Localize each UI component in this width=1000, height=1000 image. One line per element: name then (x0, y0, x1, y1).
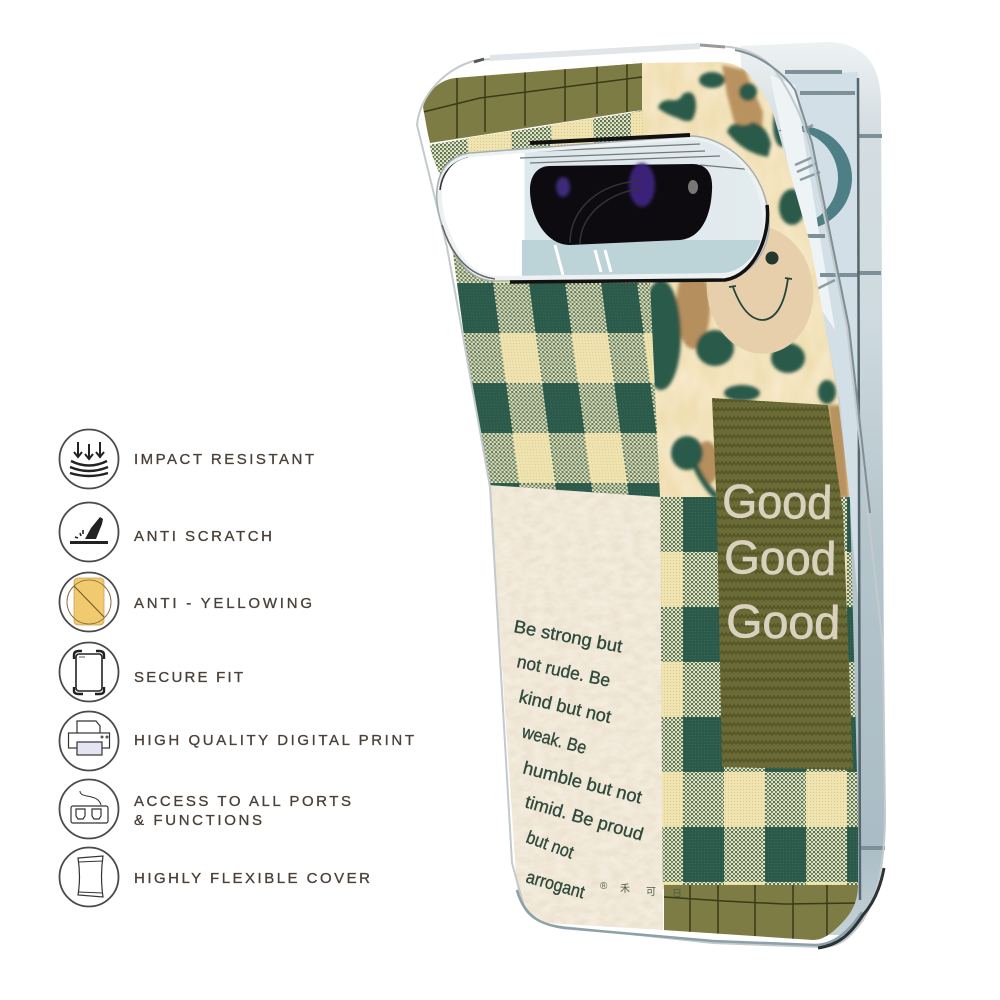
fur patch (640, 55, 865, 515)
small print characters: 日 (672, 889, 682, 900)
quote text: humble but not (521, 758, 644, 807)
quote text: but not (524, 827, 577, 863)
label: impact resistant: IMPACT RESISTANT (134, 451, 314, 468)
icon: ports (60, 780, 118, 838)
small print characters (600, 882, 680, 898)
label: anti scratch: ANTI SCRATCH (134, 528, 272, 545)
label: anti yellowing: ANTI - YELLOWING (134, 595, 312, 612)
icon: impact resistant (60, 430, 118, 488)
lens (530, 163, 712, 245)
small print characters: 禾 (620, 883, 630, 895)
icon: digital print (60, 712, 118, 770)
olive grid bottom (664, 885, 858, 940)
icon: flexible cover (60, 848, 118, 906)
label: digital print: HIGH QUALITY DIGITAL PRINT (134, 732, 414, 749)
icon: anti yellowing (60, 572, 118, 632)
gingham right patch (660, 497, 860, 889)
label: flexible cover: HIGHLY FLEXIBLE COVER (134, 870, 370, 887)
quote text: timid. Be proud (523, 792, 646, 844)
camera rim (437, 136, 769, 281)
panel: feature list (60, 430, 414, 906)
icon: secure fit (60, 642, 118, 702)
label: ports and functions: & FUNCTIONS (134, 812, 262, 829)
good text: Good (724, 530, 837, 585)
label: ports and functions (134, 793, 351, 829)
phone behind the case (740, 42, 885, 935)
olive grid top (420, 63, 642, 143)
clear case outline (417, 45, 885, 948)
cable knit patch (488, 485, 663, 935)
gingham top band (428, 111, 643, 175)
small print characters: 可 (646, 887, 656, 898)
quote text (512, 616, 646, 902)
quote text: not rude. Be (515, 651, 612, 691)
good text: Good (722, 474, 833, 529)
quote text: weak. Be (519, 721, 589, 758)
olive knit patch (712, 398, 853, 770)
label: ports and functions: ACCESS TO ALL PORTS (134, 793, 351, 810)
quote text: kind but not (517, 686, 613, 727)
good text: Good (726, 594, 841, 649)
quote text: Be strong but (512, 616, 624, 657)
good text (724, 484, 838, 640)
infographic canvas (58, 42, 886, 950)
smiley face (706, 228, 813, 354)
quote text: arrogant (524, 867, 587, 902)
gingham main patch (440, 110, 660, 497)
printed case back (420, 55, 865, 945)
small print characters: ® (600, 881, 608, 892)
camera ring on phone (742, 126, 852, 230)
camera cutout (437, 135, 769, 282)
label: secure fit: SECURE FIT (134, 669, 243, 686)
icon: anti scratch (60, 502, 118, 562)
